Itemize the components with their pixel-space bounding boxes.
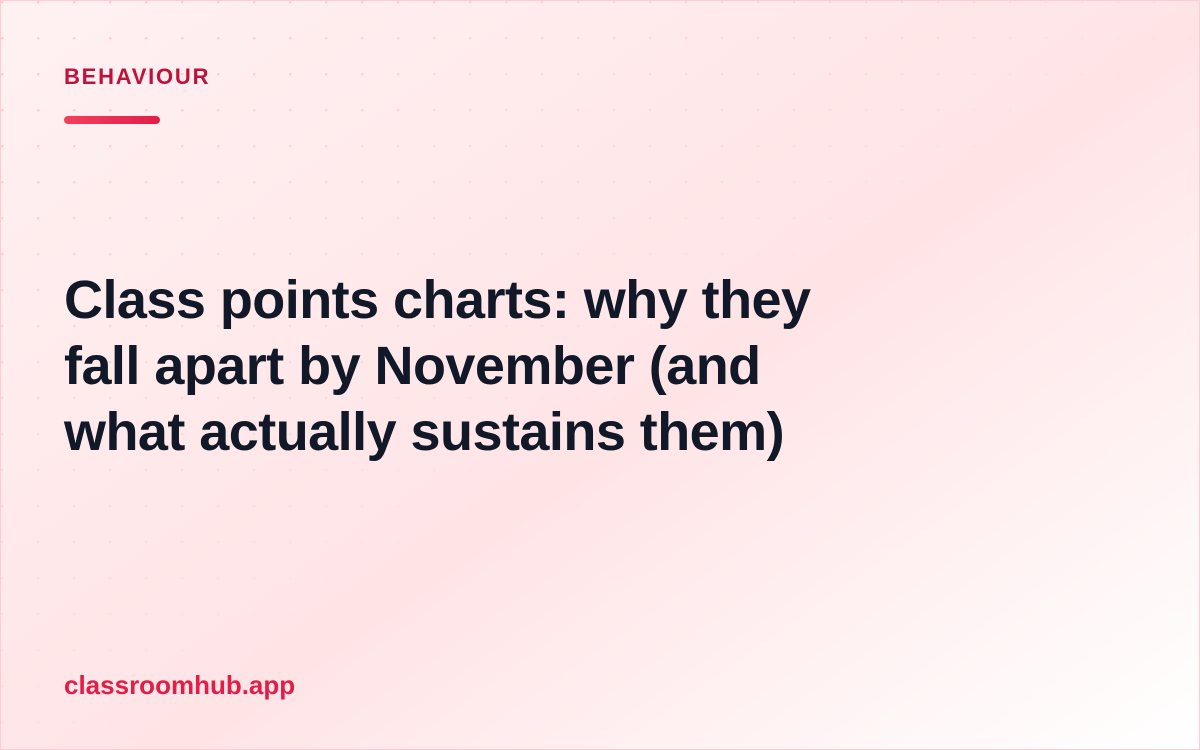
footer site name: classroomhub.app [64, 670, 295, 700]
title: what actually sustains them) [64, 402, 784, 462]
accent bar [64, 116, 160, 124]
title: fall apart by November (and [64, 336, 761, 396]
title [64, 270, 811, 462]
title: Class points charts: why they [64, 270, 811, 330]
category label: BEHAVIOUR [64, 64, 210, 89]
